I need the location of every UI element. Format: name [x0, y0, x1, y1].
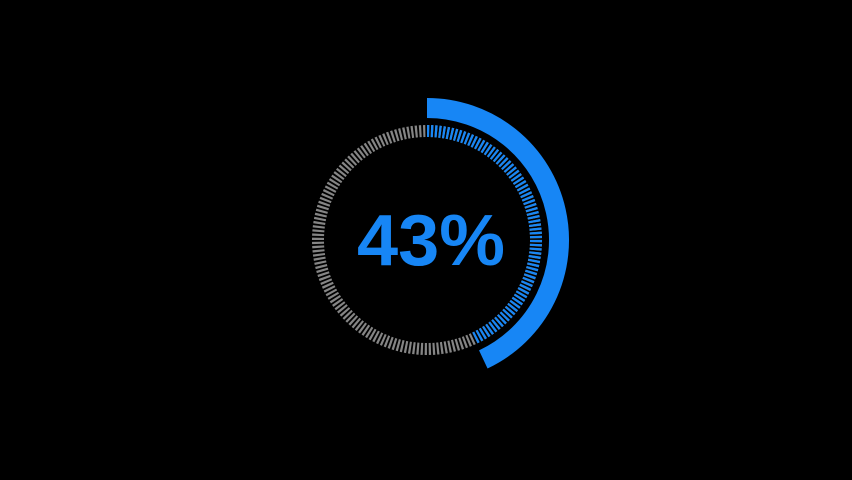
outer progress arc [427, 108, 559, 359]
percentage label: 43% [357, 201, 505, 281]
tick ring: gray background [318, 131, 536, 349]
tick ring: blue progress [427, 131, 536, 339]
